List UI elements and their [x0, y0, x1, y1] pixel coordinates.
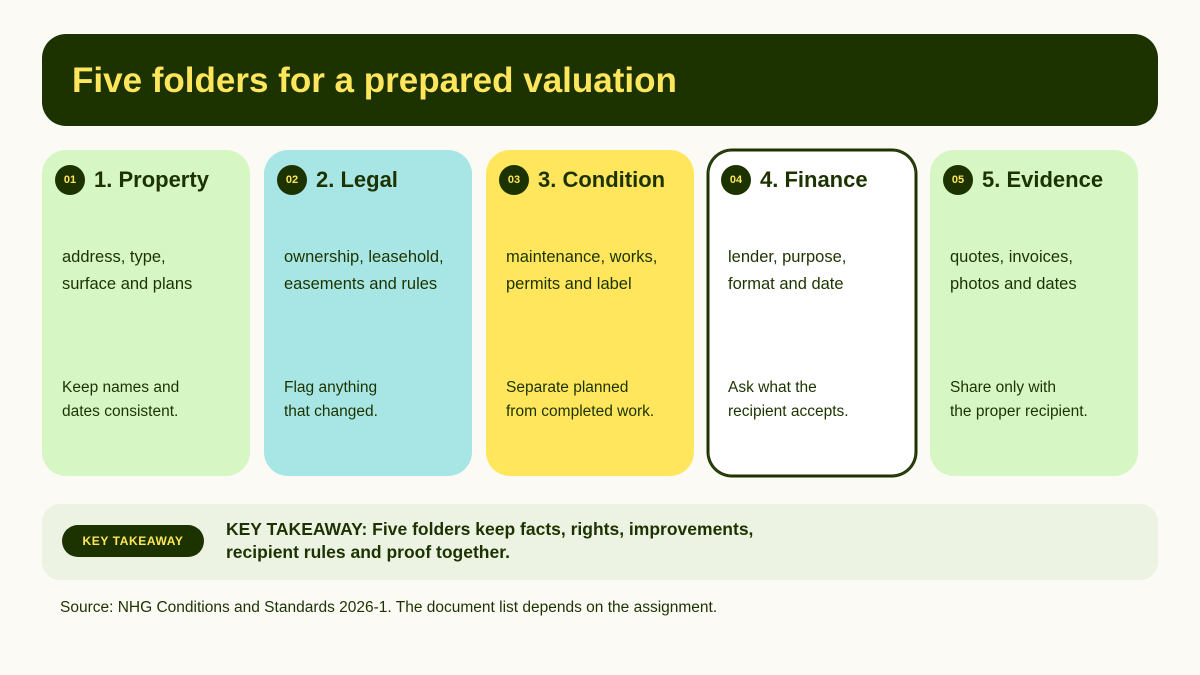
source note: Source: NHG Conditions and Standards 2026-1. The document list depends on the assignment.	[60, 599, 717, 616]
note: property: Keep names and	[62, 379, 179, 396]
note: property: dates consistent.	[62, 403, 178, 420]
text: property contents: surface and plans	[62, 275, 192, 293]
note: evidence	[950, 379, 1088, 420]
text: finance contents: lender, purpose,	[728, 248, 846, 266]
panel: finance	[708, 150, 916, 476]
badge 04	[721, 165, 751, 195]
note: evidence: the proper recipient.	[950, 403, 1088, 420]
takeaway text	[226, 519, 753, 562]
badge 02: 02	[286, 174, 298, 186]
heading: evidence: 5. Evidence	[982, 167, 1103, 192]
text: evidence contents: photos and dates	[950, 275, 1077, 293]
heading: legal: 2. Legal	[316, 167, 398, 192]
takeaway pill	[62, 525, 204, 557]
note: condition: from completed work.	[506, 403, 654, 420]
badge 04: 04	[730, 174, 742, 186]
text: property contents	[62, 248, 192, 293]
note: finance	[728, 379, 849, 420]
key takeaway panel	[42, 504, 1158, 580]
panel: evidence	[930, 150, 1138, 476]
note: legal	[284, 379, 378, 420]
text: condition contents: maintenance, works,	[506, 248, 657, 266]
text: legal contents	[284, 248, 444, 293]
panel: property	[42, 150, 250, 476]
note: property	[62, 379, 179, 420]
note: legal: Flag anything	[284, 379, 377, 396]
title banner	[42, 34, 1158, 126]
takeaway text: KEY TAKEAWAY: Five folders keep facts, rights, improvements,	[226, 519, 753, 539]
heading: property: 1. Property	[94, 167, 209, 192]
title: Five folders for a prepared valuation	[72, 61, 677, 100]
badge 03	[499, 165, 529, 195]
note: finance: recipient accepts.	[728, 403, 849, 420]
text: finance contents	[728, 248, 846, 293]
badge 03: 03	[508, 174, 520, 186]
text: property contents: address, type,	[62, 248, 166, 266]
note: legal: that changed.	[284, 403, 378, 420]
badge 02	[277, 165, 307, 195]
note: evidence: Share only with	[950, 379, 1056, 396]
heading: finance: 4. Finance	[760, 167, 868, 192]
text: finance contents: format and date	[728, 275, 844, 293]
badge 05	[943, 165, 973, 195]
badge 05: 05	[952, 174, 964, 186]
note: finance: Ask what the	[728, 379, 817, 396]
panel: legal	[264, 150, 472, 476]
note: condition	[506, 379, 654, 420]
takeaway text: recipient rules and proof together.	[226, 542, 510, 562]
badge 01	[55, 165, 85, 195]
text: legal contents: easements and rules	[284, 275, 437, 293]
text: condition contents: permits and label	[506, 275, 632, 293]
takeaway pill: KEY TAKEAWAY	[82, 534, 184, 548]
text: condition contents	[506, 248, 657, 293]
text: evidence contents	[950, 248, 1077, 293]
note: condition: Separate planned	[506, 379, 628, 396]
badge 01: 01	[64, 174, 76, 186]
text: evidence contents: quotes, invoices,	[950, 248, 1073, 266]
panel: condition	[486, 150, 694, 476]
heading: condition: 3. Condition	[538, 167, 665, 192]
text: legal contents: ownership, leasehold,	[284, 248, 444, 266]
